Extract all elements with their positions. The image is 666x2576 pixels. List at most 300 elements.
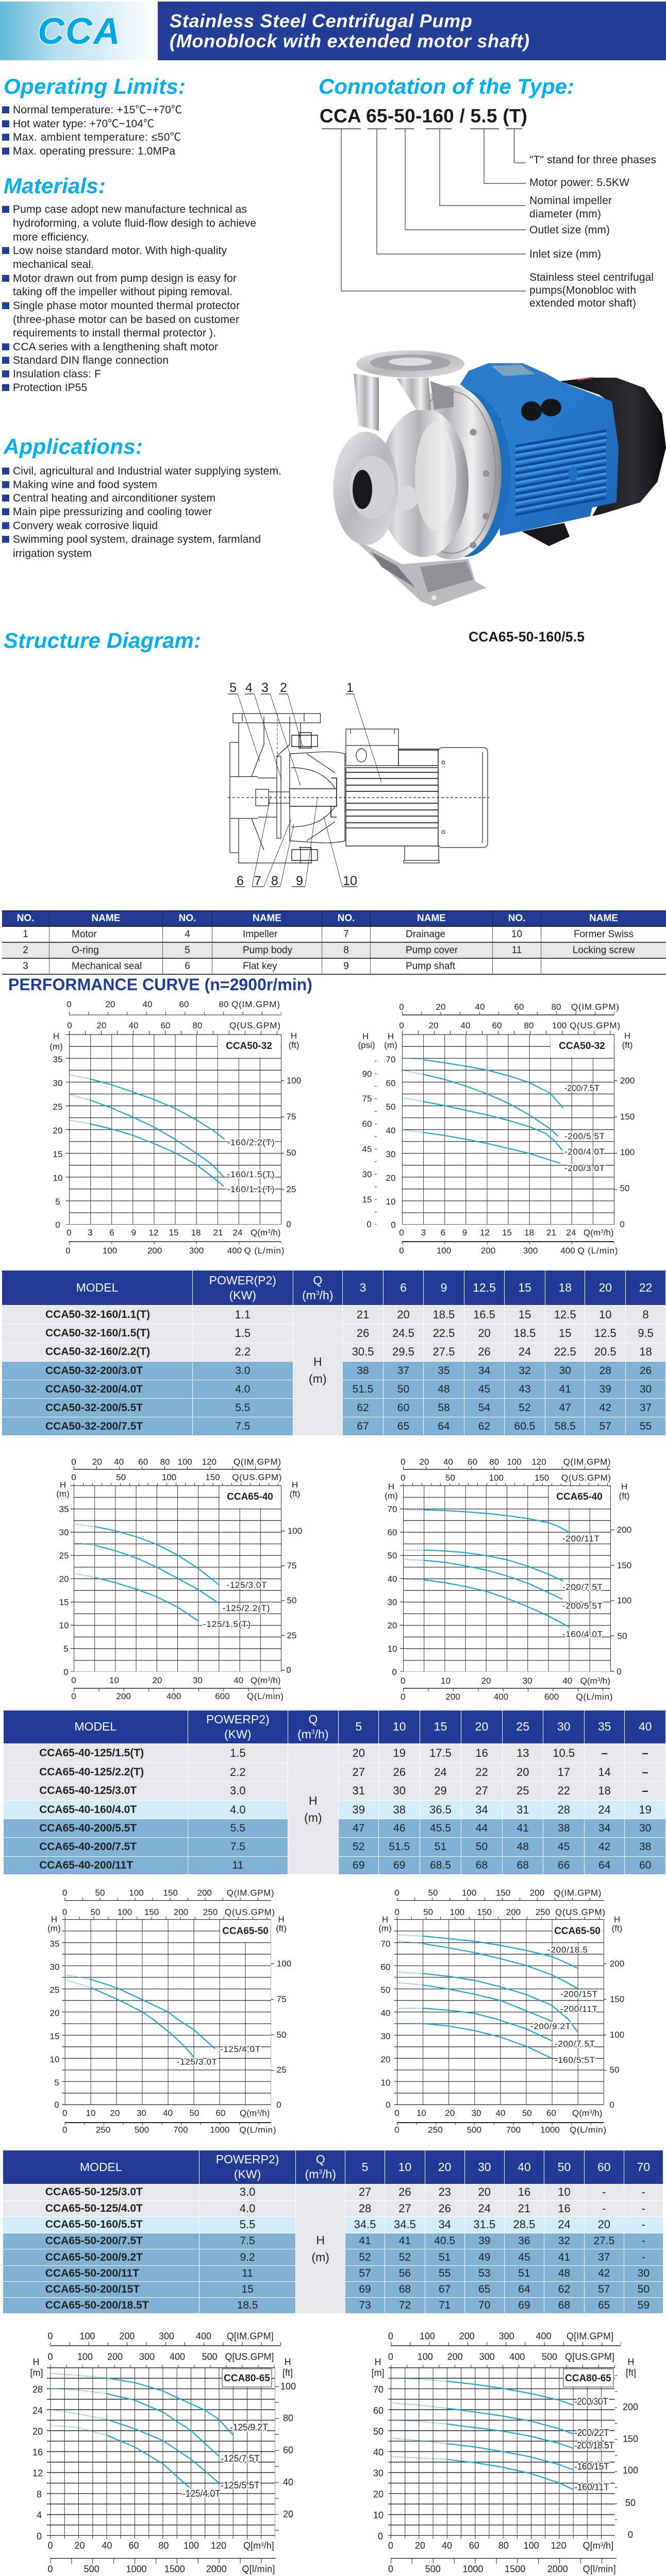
axis labels: 75	[287, 1561, 296, 1571]
table: CCA65-50 data: 73	[359, 2299, 371, 2311]
axis labels: 100	[620, 1147, 635, 1157]
axis labels: (ft)	[290, 1489, 300, 1499]
axis labels: 700	[506, 2125, 521, 2135]
curve labels: -200/11T	[560, 2004, 597, 2014]
axis labels: 250	[96, 2125, 110, 2135]
axis labels: H	[624, 1031, 630, 1041]
list: applications: Swimming pool system, drainage system, farmland	[13, 534, 261, 546]
curve labels: -125/5.5T	[221, 2480, 260, 2490]
axis labels: 1000	[126, 2564, 147, 2574]
axis labels: 200	[459, 2331, 475, 2342]
axis labels: 0	[388, 2331, 393, 2342]
model tag: CCA80-65	[565, 2373, 611, 2384]
curve labels: -200/5.5T	[564, 1131, 605, 1141]
axis labels: 200	[447, 2352, 463, 2362]
axis labels: 60	[128, 2540, 139, 2551]
table: CCA65-50 data: 70	[478, 2299, 490, 2311]
table: CCA65-40 data: 44	[476, 1822, 488, 1834]
axis labels: 500	[467, 2125, 481, 2135]
axis labels: 500	[135, 2125, 149, 2135]
table: CCA50-32 data: CCA50-32-200/5.5T	[45, 1402, 143, 1414]
axis labels: 150	[163, 1888, 178, 1898]
table: CCA50-32 data: 32	[519, 1365, 531, 1377]
table: parts list: 5	[185, 945, 190, 955]
table: CCA50-32 data: 26	[478, 1345, 491, 1358]
table: CCA50-32 data: 15	[519, 1308, 531, 1321]
axis labels: 50	[116, 1472, 126, 1482]
table: CCA65-50 data: 60	[597, 2160, 611, 2174]
table: CCA50-32 data: CCA50-32-160/1.1(T)	[45, 1309, 150, 1320]
axis labels: 24	[32, 2405, 43, 2416]
axis labels: 10	[417, 2108, 426, 2118]
axis labels: 20	[53, 1126, 62, 1136]
axis labels: 40	[386, 1126, 395, 1136]
axis labels: 150	[144, 1907, 159, 1917]
model tag: CCA80-65	[224, 2373, 270, 2384]
axis labels: 25	[59, 1551, 69, 1561]
axis labels: 50	[625, 2498, 636, 2508]
axis labels: 100	[610, 2030, 624, 2040]
axis labels: 70	[381, 1939, 390, 1949]
axis labels: 20	[32, 2427, 43, 2437]
axis labels: 24	[567, 1228, 576, 1238]
pump curves	[402, 1058, 563, 1163]
table: CCA65-50 data: -	[642, 2218, 645, 2231]
table: CCA65-40 data: 40	[639, 1720, 652, 1733]
axis labels: 100	[420, 2331, 435, 2342]
axis labels: 100	[129, 1888, 144, 1898]
axis labels	[371, 2331, 638, 2574]
list: operating limits: Max. ambient temperature: ≤50℃	[13, 131, 181, 143]
axis labels: 3	[421, 1228, 426, 1238]
list: materials: Low noise standard motor. With high-quality	[13, 245, 227, 257]
axis labels: 60	[469, 2540, 479, 2551]
table: CCA50-32 data: 16.5	[473, 1308, 495, 1321]
curve labels: -200/30T	[574, 2397, 608, 2407]
axis labels: 0	[399, 1002, 404, 1012]
table: CCA50-32 data: 27.5	[433, 1345, 455, 1358]
table: CCA50-32 data: 35	[438, 1365, 450, 1377]
pump curves	[391, 2378, 573, 2489]
table: CCA65-50 data: -	[642, 2185, 645, 2198]
table: CCA65-50 data: CCA65-50-160/5.5T	[45, 2218, 143, 2230]
table: CCA65-50 data: 67	[439, 2283, 451, 2295]
model tag	[563, 2369, 613, 2387]
table: CCA65-50 data: 71	[439, 2299, 451, 2311]
table: parts list: 1	[23, 928, 28, 940]
table: CCA65-40 data: 25	[516, 1720, 529, 1733]
axis labels: 50	[277, 2030, 286, 2040]
axis labels: 150	[205, 1472, 220, 1482]
axis labels: 0	[47, 2540, 53, 2551]
table: CCA65-50 data: CCA65-50-200/11T	[45, 2267, 139, 2279]
axis labels: 3	[257, 2109, 260, 2115]
table: CCA50-32 data: 30	[559, 1365, 571, 1377]
axis labels: H	[51, 1914, 57, 1924]
axis labels: 0	[609, 2100, 614, 2110]
axis labels: 60	[161, 1021, 170, 1030]
axis labels: 0	[394, 2108, 399, 2118]
axis labels: 3	[601, 2542, 604, 2548]
axis labels: 20	[50, 2008, 59, 2018]
chart: CCA65-50 160/200 series	[378, 1888, 624, 2135]
table: CCA65-40 data: CCA65-40-200/7.5T	[39, 1841, 137, 1853]
table: CCA65-40 data: 30	[639, 1822, 651, 1834]
table: CCA50-32 data: MODEL	[76, 1281, 118, 1294]
axis labels: 2000	[206, 2564, 227, 2574]
table: CCA50-32 data: 7.5	[235, 1420, 250, 1432]
axis labels	[378, 1888, 624, 2135]
type legend labels: pumps(Monobloc with	[529, 284, 636, 296]
table: CCA50-32 data: Q	[313, 1274, 322, 1287]
curve labels: -125/3.0T	[177, 2057, 217, 2067]
axis labels: H	[628, 2357, 634, 2367]
table: CCA65-50 data: (KW)	[234, 2167, 261, 2181]
table: CCA65-50 data: 42	[598, 2267, 610, 2279]
axis labels: 40	[102, 2540, 112, 2551]
table: CCA65-50 data: 37	[598, 2251, 610, 2263]
table: CCA65-50 data: -	[642, 2235, 645, 2247]
axis labels: 20	[481, 1676, 491, 1686]
axis labels: (m)	[49, 1042, 63, 1052]
table: CCA50-32 data: 12.5	[473, 1281, 496, 1294]
table: CCA50-32 data: 18.5	[514, 1327, 536, 1340]
table: parts list: NAME	[417, 913, 446, 924]
table: CCA65-50 data: 40	[518, 2160, 531, 2174]
table: CCA50-32 data: 8	[642, 1308, 649, 1321]
table: CCA50-32 data: 57	[600, 1420, 611, 1432]
axis labels: 200	[445, 1692, 460, 1702]
chart: CCA80-65 160/200 series	[371, 2331, 638, 2574]
table: CCA65-40 data: 22	[475, 1766, 488, 1778]
table: CCA50-32 data: 52	[519, 1402, 531, 1414]
table: parts list: NO.	[17, 913, 34, 924]
table: CCA65-40 data: 50	[476, 1841, 488, 1853]
model tag: CCA65-50	[554, 1926, 601, 1937]
axis labels: 400	[494, 1692, 508, 1702]
table: CCA65-40 data: (m3/h)	[297, 1727, 329, 1741]
axis labels: 15	[50, 2031, 59, 2041]
table: CCA65-40 data: 69	[393, 1859, 405, 1871]
pump product photo (illustration)	[333, 350, 666, 606]
axis labels: 10	[441, 1676, 451, 1686]
axis labels: 0	[367, 1219, 372, 1229]
table: CCA65-50 data: 26	[438, 2202, 451, 2215]
part numbers: 4	[245, 681, 253, 695]
axis labels: 0	[71, 1457, 76, 1467]
table: CCA65-40 data: 20	[475, 1720, 488, 1733]
table: CCA65-50 data: MODEL	[80, 2160, 122, 2174]
axis labels: 10	[50, 2055, 59, 2064]
axis labels: 0	[401, 1457, 406, 1467]
axis labels: 40	[143, 999, 152, 1009]
axis labels: 100	[77, 2352, 93, 2362]
axis labels: 100	[489, 1473, 504, 1483]
table: CCA65-50 data: CCA65-50-200/7.5T	[45, 2235, 143, 2247]
axis labels: 120	[531, 1457, 546, 1467]
table: CCA65-40 data: 38	[393, 1803, 406, 1816]
table: CCA50-32 data: 1.1	[235, 1308, 251, 1321]
axis labels: 0	[67, 1021, 72, 1030]
axis labels: 100	[162, 1472, 176, 1482]
table: CCA65-50 data: 45	[518, 2251, 530, 2263]
curve labels: -125/1.5(T)	[203, 1619, 251, 1629]
axis labels: 40	[373, 2447, 384, 2458]
axis labels: 70	[386, 1055, 395, 1064]
table: CCA65-50 data: CCA65-50-200/15T	[45, 2283, 140, 2295]
table: CCA65-40 data: 35	[598, 1720, 611, 1733]
table: CCA65-40 data: 34	[475, 1803, 488, 1816]
table: CCA65-40 data: 64	[598, 1859, 610, 1871]
model tag: CCA65-40	[556, 1492, 603, 1502]
table: CCA50-32 data: (KW)	[229, 1288, 256, 1301]
axis labels: Q(IM.GPM)	[554, 1888, 601, 1898]
axis labels: 400	[166, 1691, 181, 1701]
axis labels: 0	[394, 1907, 399, 1917]
table: CCA65-40 data: 2.2	[230, 1766, 246, 1778]
axis labels: (m)	[378, 1924, 392, 1934]
axis labels: Q(US.GPM)	[555, 1907, 605, 1917]
table: CCA50-32 data: 15	[518, 1281, 531, 1294]
axis labels: 80	[158, 2540, 169, 2551]
table: CCA50-32 data: 30	[640, 1383, 652, 1395]
table: parts list: Pump shaft	[406, 960, 455, 972]
axis labels: 3	[268, 1229, 271, 1234]
table: CCA50-32 data: 58	[438, 1402, 450, 1414]
table: CCA50-32 data: 3.0	[235, 1365, 250, 1377]
axis labels: H	[53, 1031, 59, 1041]
axis labels: 60	[546, 2108, 556, 2118]
table: CCA65-50 data: 59	[638, 2299, 650, 2311]
table: CCA50-32 data: CCA50-32-200/4.0T	[45, 1383, 143, 1395]
axis labels: 20	[415, 2540, 425, 2551]
table: CCA65-40 data: MODEL	[74, 1720, 116, 1733]
table: CCA50-32 data: 26	[640, 1365, 652, 1377]
heading: structure diagram: Structure Diagram:	[4, 629, 201, 652]
table: CCA65-50 data: 24	[558, 2218, 571, 2231]
table: CCA50-32 data: 24.5	[392, 1327, 414, 1340]
axis labels: 60	[138, 1457, 148, 1467]
axis labels: 100	[280, 2381, 296, 2392]
table: CCA65-40 data: 27	[475, 1784, 488, 1797]
table: CCA50-32 data: 48	[438, 1383, 450, 1395]
pump curves	[51, 2374, 233, 2487]
axis labels: 40	[461, 1021, 470, 1030]
axis labels: (m)	[56, 1489, 70, 1499]
axis labels: 0	[62, 1888, 67, 1898]
axis labels: 0	[62, 2125, 67, 2135]
list: materials: requirements to install thermal protector ).	[13, 327, 216, 339]
list: applications: Making wine and food system	[13, 479, 157, 490]
axis labels: /h)	[271, 1228, 280, 1238]
axis labels: Q[IM.GPM]	[567, 2331, 613, 2342]
table: CCA65-40 data: 42	[598, 1841, 610, 1853]
axis labels: Q (L/min)	[244, 1246, 285, 1256]
banner title: Stainless Steel Centrifugal Pump	[170, 10, 472, 31]
part numbers: 1	[346, 681, 354, 695]
axis labels: 30	[362, 1170, 372, 1179]
axis labels: Q(US.GPM)	[229, 1021, 280, 1030]
axis labels: (ft)	[612, 1924, 622, 1934]
pump curves	[76, 1524, 220, 1621]
curve labels: -200/5.5T	[562, 1601, 603, 1611]
axis labels: 9	[131, 1228, 136, 1238]
curve labels: -125/4.0T	[220, 2044, 260, 2054]
table: CCA65-50 data: Q	[316, 2153, 325, 2166]
table: CCA65-40 data: 69	[353, 1859, 364, 1871]
axis labels: 0	[71, 1691, 76, 1701]
axis labels: Q(IM.GPM)	[231, 999, 280, 1009]
curve labels	[203, 1580, 270, 1629]
table: CCA65-40 data: 46	[393, 1822, 405, 1834]
table: CCA65-40 data: 22	[557, 1784, 570, 1797]
table: CCA50-32 data: 30.5	[352, 1345, 374, 1358]
axis labels: 75	[287, 1112, 296, 1122]
axis labels: 0	[47, 2331, 53, 2342]
table: CCA65-40 data: 68	[476, 1859, 488, 1871]
list: materials	[2, 204, 256, 394]
curve labels: -160/1.1(T)	[227, 1184, 274, 1194]
list: applications: Civil, agricultural and Industrial water supplying system.	[13, 465, 281, 477]
curve labels: -200/7.5T	[562, 1582, 603, 1592]
axis labels: Q[IM.GPM]	[227, 2331, 274, 2342]
axis labels: 500	[425, 2564, 441, 2574]
table: CCA65-50 data: 11	[242, 2267, 253, 2279]
axis labels: Q(m	[251, 1228, 268, 1238]
table: CCA65-40 data: 17	[557, 1766, 570, 1778]
axis labels: [m]	[371, 2367, 385, 2378]
table: CCA65-40 data: 11	[232, 1859, 243, 1871]
axis labels: Q(m	[584, 1228, 601, 1238]
axis labels: H	[374, 2357, 381, 2367]
axis labels: 30	[50, 1962, 59, 1972]
axis labels: 12	[480, 1228, 490, 1238]
axis labels: 0	[628, 2530, 633, 2540]
table: CCA65-50 data: 10	[558, 2185, 571, 2198]
table: CCA65-50 data: CCA65-50-125/3.0T	[45, 2186, 143, 2198]
axis labels: 15	[362, 1195, 372, 1205]
axis labels: 0	[388, 2540, 393, 2551]
axis labels: 60	[514, 1002, 524, 1012]
table: CCA65-40 data: 13	[517, 1747, 529, 1759]
table: CCA65-50 data: 18.5	[237, 2299, 258, 2311]
curve labels: -160/15T	[574, 2462, 609, 2472]
pump curves	[405, 1510, 569, 1627]
axis labels: 20	[429, 1021, 438, 1030]
table: CCA65-50 data: (m3/h)	[305, 2167, 336, 2181]
table: CCA50-32 data: 18	[558, 1281, 572, 1294]
axis labels: 21	[546, 1228, 556, 1238]
table: CCA50-32 data: 5.5	[235, 1402, 250, 1414]
table: CCA65-40 data: 25	[517, 1784, 529, 1797]
table: CCA65-50 data: -	[602, 2185, 606, 2198]
axis labels: H	[278, 1914, 285, 1924]
axis labels: 100	[552, 1021, 567, 1030]
axis labels: 3	[597, 1677, 601, 1683]
axis labels: 40	[442, 2540, 452, 2551]
table: CCA65-40 data: 5.5	[230, 1822, 245, 1834]
axis labels: 16	[32, 2447, 43, 2458]
axis labels: 25	[53, 1102, 62, 1112]
chart: CCA65-40 125 series	[56, 1457, 302, 1701]
table: parts list: 8	[343, 945, 349, 955]
header banner	[0, 2, 666, 60]
structure section drawing	[228, 681, 490, 888]
table: CCA65-40 data: –	[642, 1766, 648, 1778]
series logo: CCA: CCA	[38, 11, 120, 52]
axis labels: (ft)	[619, 1491, 629, 1501]
axis labels: 8	[37, 2489, 42, 2500]
axis labels: 0	[47, 2564, 53, 2574]
axis labels: 0	[391, 1220, 396, 1230]
table: CCA50-32 data: 43	[519, 1383, 531, 1395]
axis labels: 60	[468, 1457, 477, 1467]
table: CCA65-50 data: 72	[399, 2299, 411, 2311]
type legend labels	[529, 154, 656, 309]
type legend labels: "T" stand for three phases	[529, 154, 656, 166]
axis labels: 60	[283, 2445, 293, 2455]
axis labels: 0	[66, 1228, 72, 1238]
axis labels: Q(US.GPM)	[561, 1473, 611, 1483]
table: CCA50-32 data: 47	[559, 1402, 571, 1414]
axis labels: 400	[170, 2352, 185, 2362]
model caption: CCA65-50-160/5.5	[469, 629, 585, 645]
axis labels: 5	[54, 2078, 59, 2088]
axis labels: Q(IM.GPM)	[234, 1457, 281, 1467]
axis labels: 1000	[210, 2125, 229, 2135]
table: CCA65-40 data: 51	[435, 1841, 446, 1853]
axis labels: 60	[373, 2405, 384, 2416]
table: parts list: Drainage	[406, 928, 445, 940]
axis labels: H	[285, 2357, 291, 2367]
table: CCA65-40 data: 45	[558, 1841, 570, 1853]
curve labels: -200/18.5T	[574, 2440, 614, 2450]
axis labels: 0	[47, 2352, 53, 2362]
table: CCA65-50 data: 20	[478, 2185, 491, 2198]
list: operating limits: Max. operating pressure: 1.0MPa	[13, 145, 175, 157]
pump curves	[65, 1975, 215, 2057]
type designation diagram: CCA 65-50-160 / 5.5 (T)	[320, 105, 527, 127]
table: CCA65-50 data: (m)	[311, 2250, 329, 2264]
table: CCA50-32 data: 62	[478, 1420, 490, 1432]
axis labels: 25	[50, 1985, 59, 1995]
table: parts list: 11	[512, 945, 522, 955]
axis labels: 0	[401, 1676, 406, 1686]
table: CCA65-40 data: 38	[639, 1841, 651, 1853]
axis labels: 200	[623, 2402, 638, 2412]
axis labels: 20	[373, 2489, 384, 2500]
table: CCA65-50 data: 20	[598, 2218, 610, 2231]
table: CCA65-40 data: 26	[393, 1766, 406, 1778]
type legend labels: extended motor shaft)	[529, 297, 636, 309]
axis labels: 80	[552, 1002, 561, 1012]
table: CCA50-32 data: (m)	[309, 1372, 327, 1385]
table: CCA65-40 data: 1.5	[230, 1747, 246, 1759]
pump curves	[397, 1935, 578, 2058]
table: parts list: O-ring	[72, 945, 99, 955]
axis labels: 40	[129, 1021, 138, 1030]
curve labels: -125/9.2T	[230, 2422, 268, 2433]
table: CCA65-50 data: 9.2	[240, 2251, 255, 2263]
curve labels: -125/3.0T	[227, 1580, 267, 1590]
list: materials: mechanical seal.	[13, 259, 94, 270]
list: applications: Convery weak corrosive liquid	[13, 520, 158, 532]
axis labels: 10	[109, 1675, 119, 1685]
axis labels: 4	[37, 2510, 42, 2520]
table: CCA65-50 data: -	[602, 2202, 606, 2215]
list: applications	[2, 465, 281, 560]
axis labels: 30	[193, 1675, 203, 1685]
